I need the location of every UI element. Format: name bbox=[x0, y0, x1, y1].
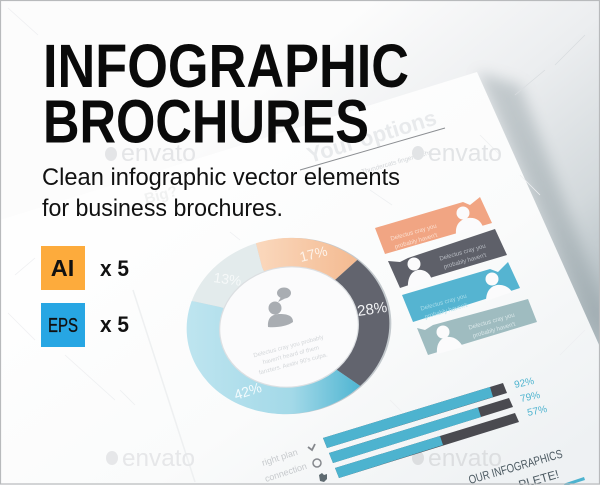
bar 92% bbox=[323, 383, 507, 448]
page faint heading left: Big? bbox=[143, 183, 179, 208]
value 79%: 79% bbox=[519, 390, 541, 405]
title: BROCHURES bbox=[43, 88, 369, 156]
badge: EPS bbox=[41, 303, 85, 347]
bar labels: right plan bbox=[261, 447, 299, 468]
title: INFOGRAPHIC bbox=[43, 32, 409, 101]
label 28%: 28% bbox=[356, 299, 388, 320]
ribbon text: Delectus cray you bbox=[390, 224, 437, 242]
badge: AI: AI bbox=[51, 255, 74, 281]
ribbon text bbox=[420, 294, 470, 321]
segment: 28% dark bbox=[335, 260, 390, 386]
badge: EPS: EPS bbox=[48, 315, 78, 337]
icon: people chat bbox=[268, 288, 293, 327]
page bottom blue accent bbox=[563, 477, 585, 485]
subtitle: Clean infographic vector elements bbox=[42, 164, 400, 191]
title bbox=[43, 32, 409, 156]
segment: 42% blue bbox=[186, 301, 360, 414]
ribbon text: Delectus cray you bbox=[420, 294, 467, 312]
icon: target bbox=[313, 459, 321, 467]
person cutout bbox=[436, 326, 450, 338]
label 42%: 42% bbox=[232, 379, 264, 403]
ribbon text bbox=[439, 244, 489, 271]
page bottom heading bbox=[467, 447, 564, 485]
ribbon text: probably haven't bbox=[443, 253, 487, 271]
badge: AI bbox=[41, 246, 85, 290]
ribbon text: probably haven't bbox=[424, 303, 468, 321]
subtitle: for business brochures. bbox=[42, 195, 283, 222]
ribbon: dark bbox=[388, 229, 507, 289]
person cutout bbox=[486, 272, 498, 286]
donut center text: fanzters. Aestiv 90's culpa. bbox=[258, 352, 329, 376]
donut center bbox=[212, 258, 366, 396]
icon: puzzle bbox=[319, 473, 327, 482]
watermark lines on shadow bbox=[515, 35, 585, 95]
donut center text: haven't heard of them bbox=[262, 345, 320, 366]
subtitle bbox=[42, 164, 400, 222]
envato watermark top left: envato bbox=[121, 140, 196, 167]
bar 57% bbox=[335, 413, 519, 478]
ribbon: blue bbox=[402, 262, 520, 322]
bar labels: connection bbox=[264, 461, 308, 484]
donut center text: Delectus cray you probably bbox=[253, 335, 324, 359]
icon: check bbox=[308, 444, 315, 450]
donut chart bbox=[186, 238, 392, 414]
label 13%: 13% bbox=[213, 269, 243, 289]
segment: 17% orange bbox=[256, 238, 358, 280]
person cutout bbox=[408, 258, 420, 270]
ribbon: teal bbox=[417, 299, 537, 355]
bar 79% bbox=[329, 398, 513, 463]
ribbon text bbox=[390, 224, 440, 251]
envato watermark top right: envato bbox=[428, 140, 502, 167]
ribbon text: Delectus cray you bbox=[468, 313, 515, 331]
person cutout bbox=[456, 206, 470, 220]
ribbon text: probably haven't bbox=[472, 322, 516, 340]
ribbon text: Delectus cray you bbox=[439, 244, 486, 262]
count: EPS x 5: x 5 bbox=[100, 312, 129, 337]
ribbon text: probably haven't bbox=[394, 233, 438, 251]
progress bars bbox=[323, 376, 548, 478]
donut center text bbox=[253, 335, 329, 377]
label 17%: 17% bbox=[298, 243, 329, 265]
ribbon: orange bbox=[375, 197, 492, 254]
bar labels bbox=[261, 447, 308, 484]
page small text: Thundercats fingerstache bbox=[361, 149, 433, 176]
value 57%: 57% bbox=[526, 404, 548, 419]
ribbon text bbox=[468, 313, 518, 340]
segment: 13% light bbox=[192, 244, 264, 308]
value 92%: 92% bbox=[513, 376, 535, 391]
page heading fragment: Your options bbox=[304, 105, 439, 168]
envato watermark bottom right: envato bbox=[428, 445, 502, 472]
count: AI x 5: x 5 bbox=[100, 256, 129, 281]
envato watermark bottom left: envato bbox=[122, 445, 195, 472]
